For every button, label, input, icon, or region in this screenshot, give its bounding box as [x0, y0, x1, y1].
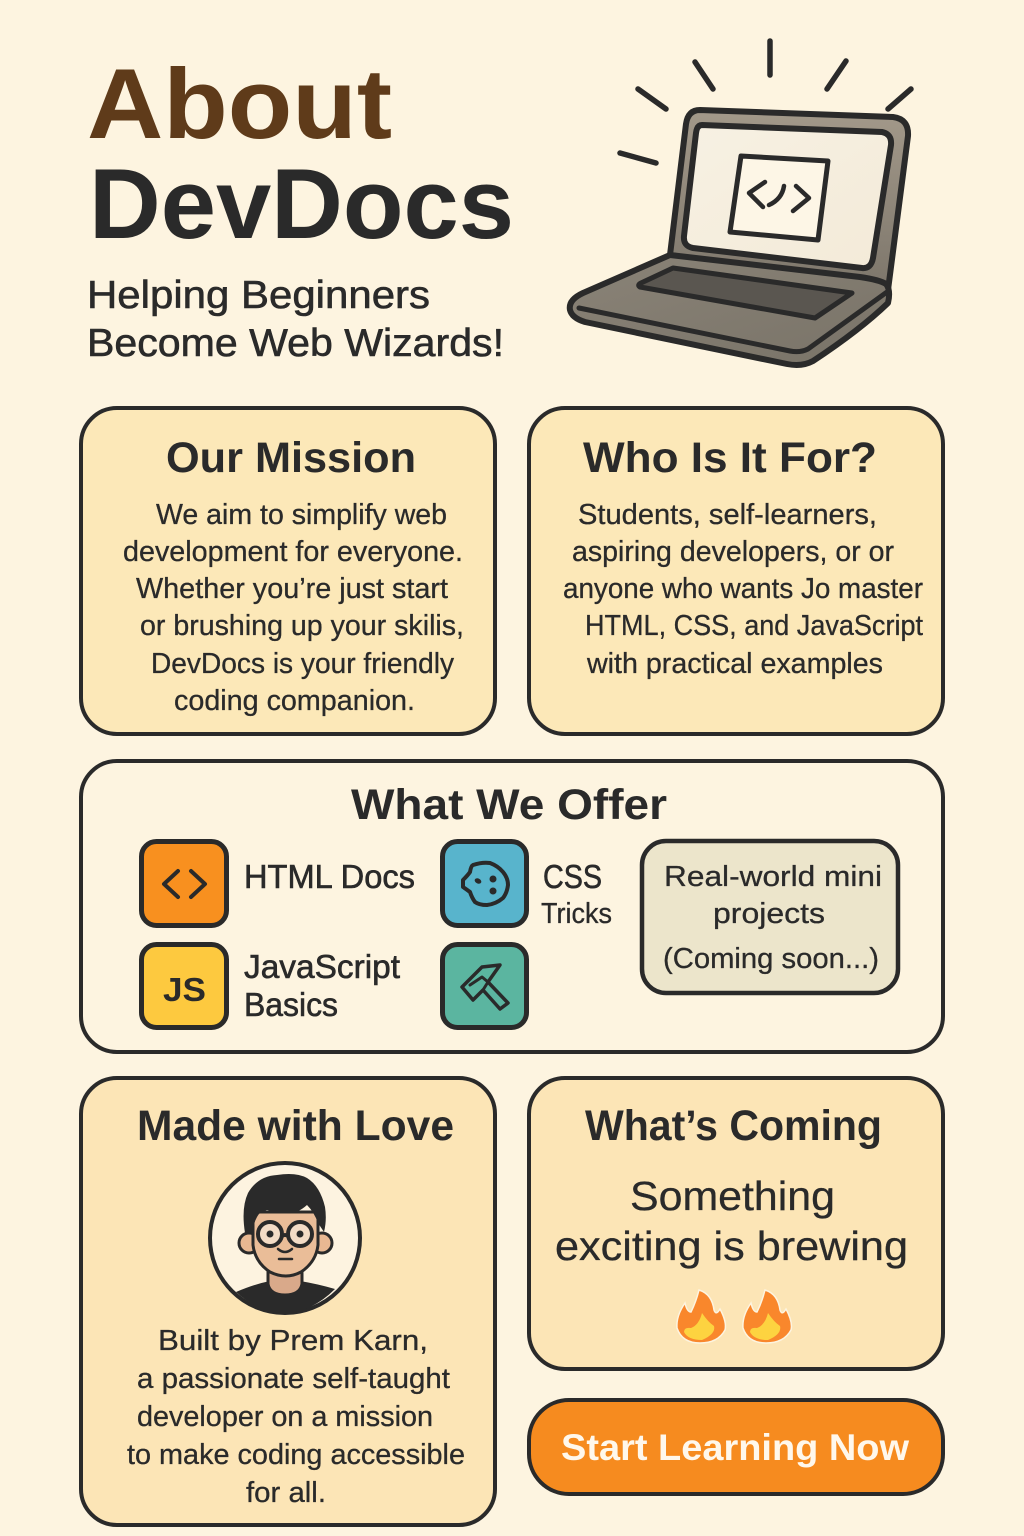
audience text: anyone who wants Jo master [563, 573, 923, 605]
label: css tricks: CSS [543, 858, 602, 895]
heading: our mission: Our Mission [166, 434, 416, 482]
laptop screen [684, 125, 891, 268]
callout: real-world mini projects [642, 841, 898, 993]
icon: hammer [442, 944, 526, 1028]
heading: what we offer: What We Offer [351, 781, 667, 829]
button: start learning now: Start Learning Now [561, 1427, 909, 1468]
keyboard [639, 268, 852, 318]
audience text: Students, self-learners, [578, 499, 877, 531]
audience text [563, 499, 923, 680]
laptop base [570, 255, 889, 365]
mission text [123, 499, 464, 717]
mission text: Whether you’re just start [136, 573, 448, 605]
subtitle: Become Web Wizards! [87, 322, 504, 365]
heading: made with love: Made with Love [137, 1102, 454, 1150]
panel: what we offer [81, 761, 943, 1052]
heading: who is it for: Who Is It For? [583, 434, 877, 482]
mission text: We aim to simplify web [156, 499, 447, 531]
icon: javascript: JS [163, 971, 206, 1008]
audience text: aspiring developers, or or [572, 536, 894, 568]
code window [730, 156, 828, 240]
label: css tricks: Tricks [541, 898, 612, 930]
subtitle: Helping Beginners [87, 274, 430, 317]
title: DevDocs [89, 148, 514, 259]
mission text: DevDocs is your friendly [151, 648, 454, 680]
laptop lid [670, 110, 908, 290]
panel: who is it for [529, 408, 943, 734]
coming text: exciting is brewing [555, 1223, 908, 1269]
mission text: development for everyone. [123, 536, 463, 568]
callout: real-world mini projects: Real-world mini [664, 861, 882, 893]
neck [268, 1268, 302, 1295]
icon: html code brackets [142, 842, 226, 926]
bio text: to make coding accessible [127, 1439, 465, 1471]
bio text: for all. [246, 1477, 326, 1509]
bio text: developer on a mission [137, 1401, 433, 1433]
icon: developer avatar [210, 1163, 360, 1313]
icon: flames [677, 1290, 791, 1343]
panel: what's coming [529, 1078, 943, 1369]
title: About [87, 48, 392, 159]
rays [620, 41, 911, 163]
mission text: or brushing up your skilis, [140, 610, 464, 642]
subtitle [87, 274, 504, 365]
panel: made with love [81, 1078, 495, 1525]
bio text: Built by Prem Karn, [158, 1325, 428, 1357]
label: css tricks [541, 858, 612, 930]
coming text [555, 1173, 908, 1269]
bio text [127, 1325, 465, 1509]
audience text: HTML, CSS, and JavaScript [585, 610, 923, 642]
hair [244, 1174, 326, 1233]
panel: our mission [81, 408, 495, 734]
mission text: coding companion. [174, 685, 415, 717]
face [253, 1212, 318, 1276]
label: javascript basics [244, 948, 400, 1023]
shoulders [236, 1281, 335, 1313]
audience text: with practical examples [586, 648, 883, 680]
icon: css palette [442, 842, 526, 926]
ears [239, 1233, 259, 1253]
callout: real-world mini projects: projects [713, 898, 825, 930]
glasses [258, 1222, 282, 1246]
icon: laptop with code screen [570, 41, 911, 365]
title [87, 48, 514, 259]
label: javascript basics: JavaScript [244, 948, 400, 985]
heading: what's coming: What’s Coming [585, 1102, 882, 1150]
label: html docs: HTML Docs [244, 858, 415, 895]
icon: javascript [142, 944, 226, 1028]
nose and mouth [278, 1249, 292, 1259]
button: start learning now [529, 1400, 943, 1494]
label: javascript basics: Basics [244, 986, 338, 1023]
callout: real-world mini projects: (Coming soon...) [663, 943, 879, 975]
coming text: Something [630, 1173, 835, 1219]
bio text: a passionate self-taught [137, 1363, 450, 1395]
